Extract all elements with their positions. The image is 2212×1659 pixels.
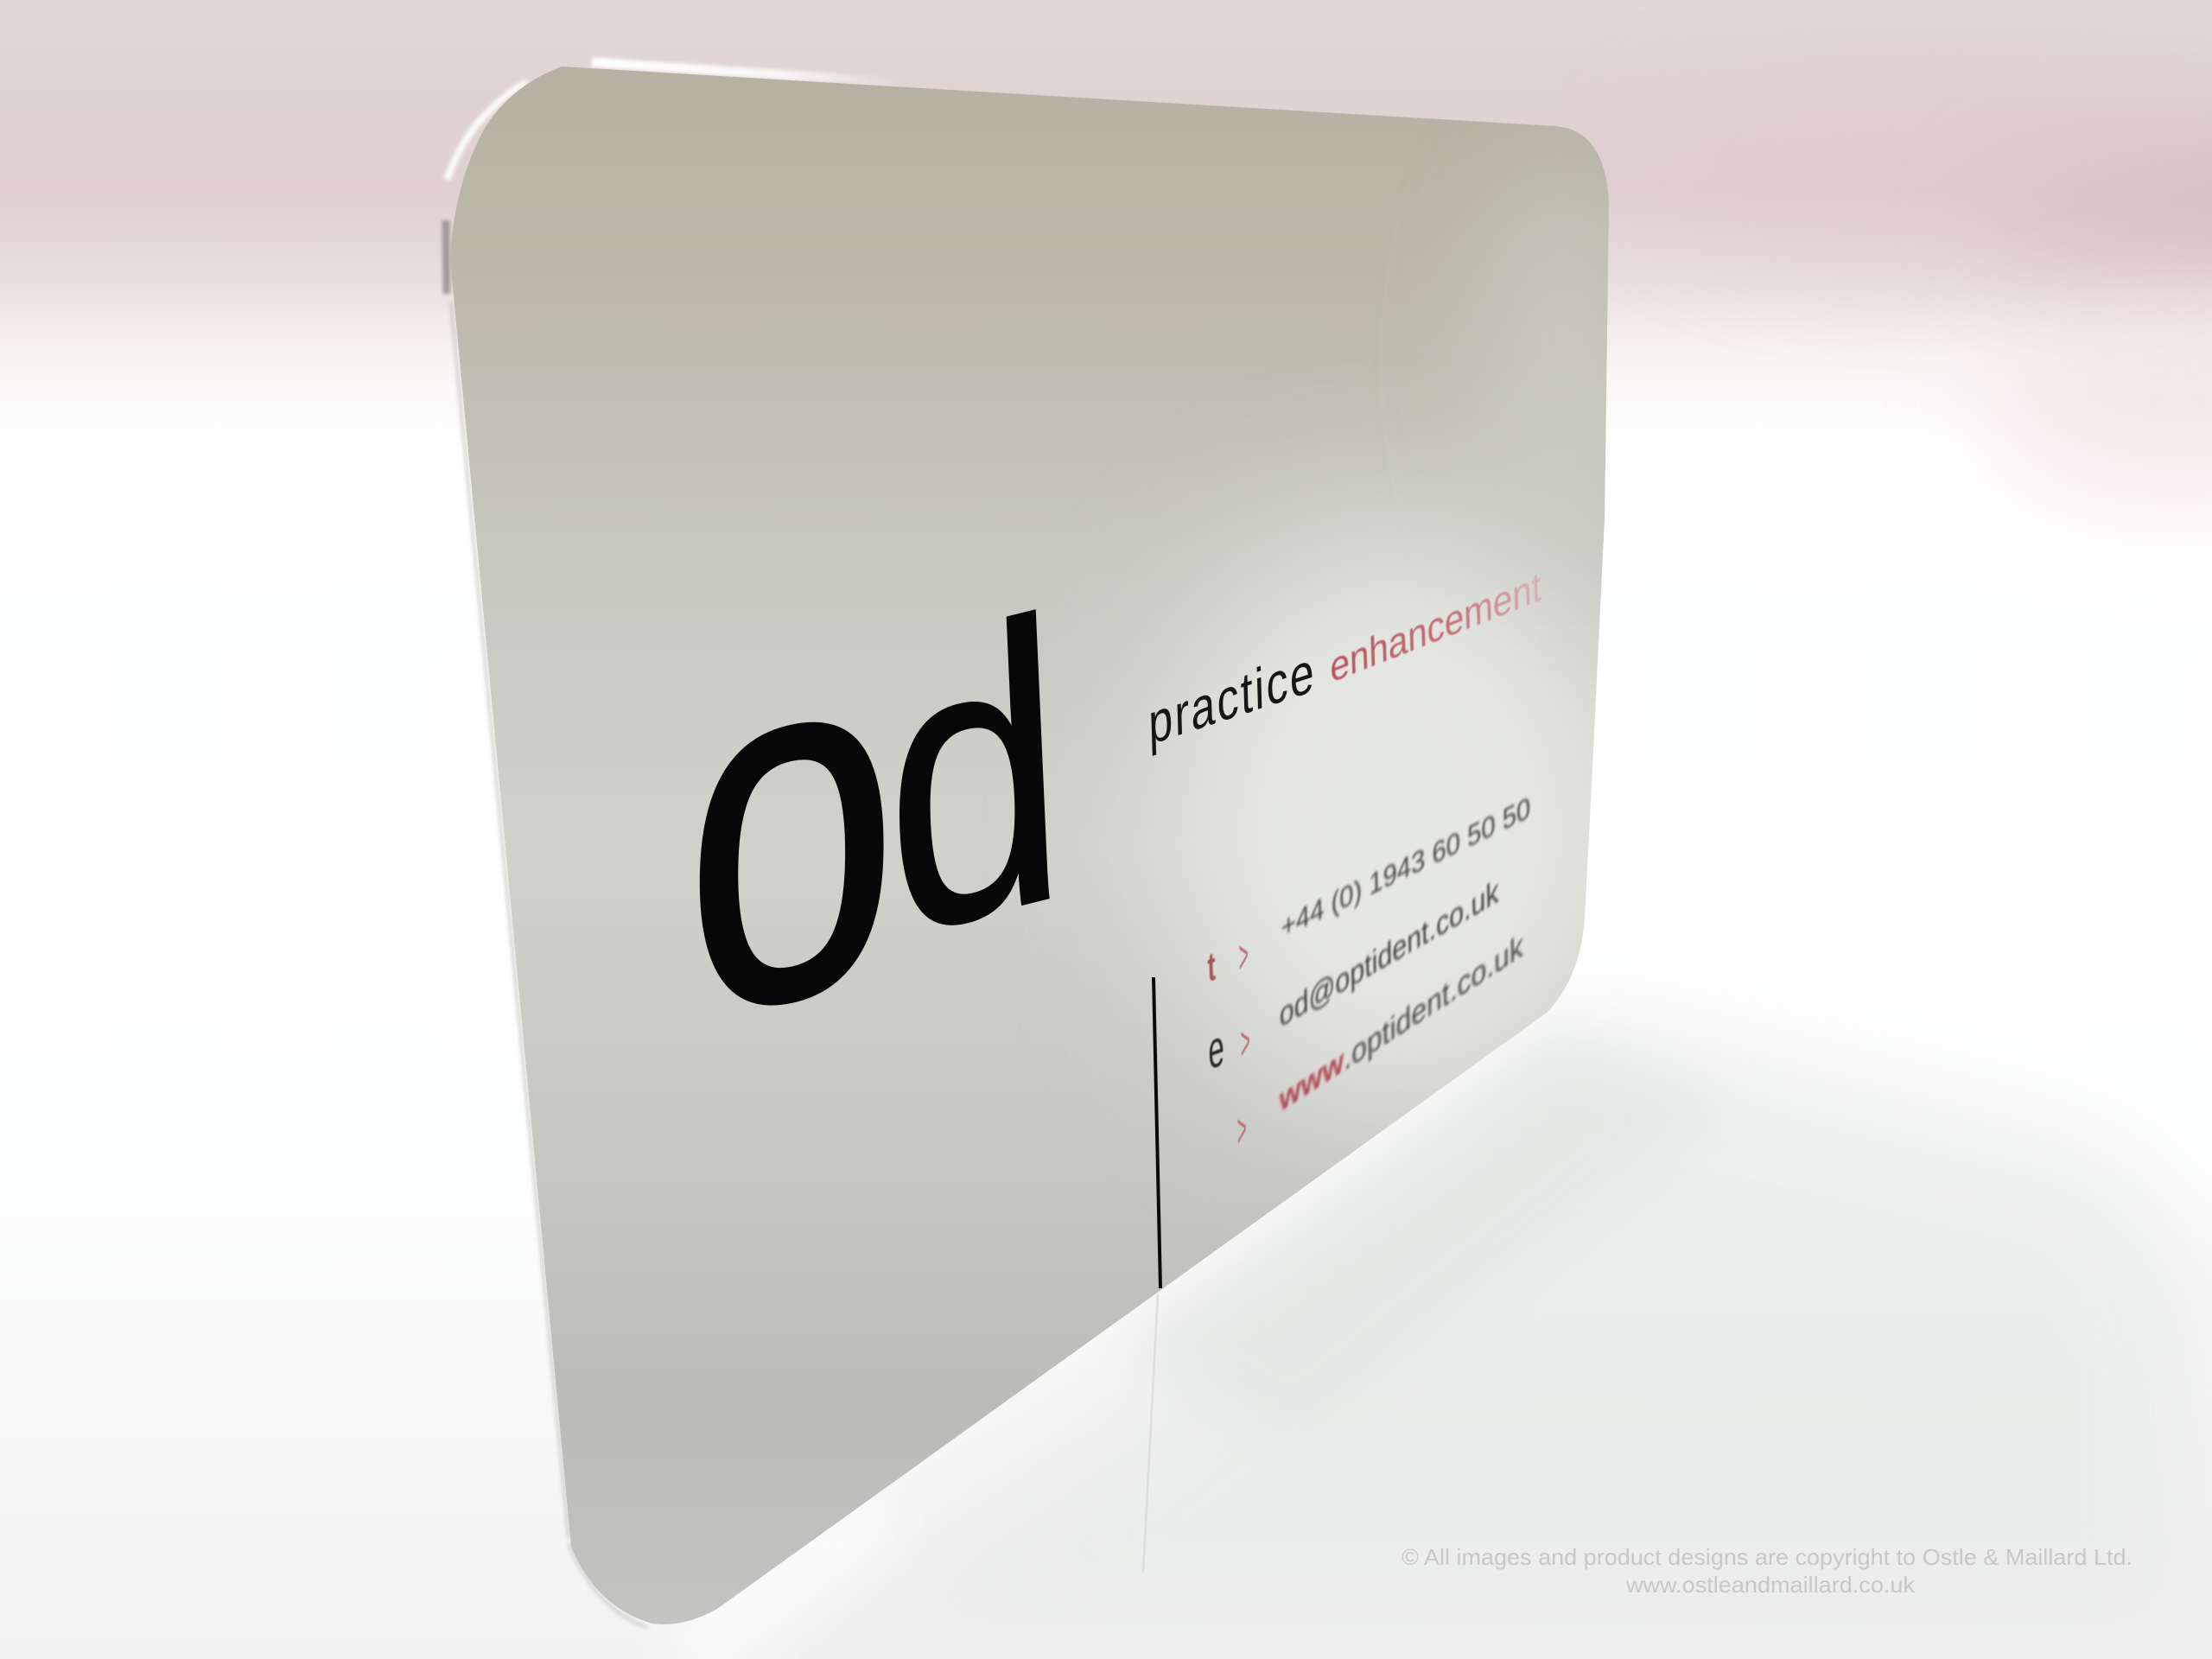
business card panel: [415, 43, 1642, 1650]
rule reflection: [1143, 1294, 1158, 1573]
email row: e: [1207, 1018, 1225, 1081]
logo: od: d: [875, 533, 1073, 1022]
copyright notice: www.ostleandmaillard.co.uk: [1625, 1572, 1916, 1598]
phone row: >: [1238, 926, 1249, 984]
logo: od: [685, 522, 1073, 1125]
email row: od@optident.co.uk: [1279, 871, 1500, 1034]
copyright notice: © All images and product designs are copyright to Ostle & Maillard Ltd.: [1402, 1544, 2133, 1570]
tagline: practice enhancement: enhancement: [1330, 563, 1542, 691]
tagline: practice enhancement: practice: [1147, 637, 1317, 757]
card shading: right edge: [1494, 185, 1609, 442]
logo: od: o: [685, 522, 898, 1125]
email row: >: [1240, 1013, 1250, 1071]
web row: >: [1236, 1100, 1247, 1158]
vertical rule: [1154, 977, 1160, 1288]
tagline: practice enhancement: [1147, 563, 1542, 757]
phone row: t: [1207, 944, 1217, 991]
copyright notice: [1402, 1544, 2133, 1598]
phone row: +44 (0) 1943 60 50 50: [1281, 791, 1531, 945]
email row: [1207, 871, 1500, 1081]
floor shadow: card reflection: [683, 1020, 2212, 1659]
web row: www.optident.co.uk: [1278, 926, 1524, 1121]
card edge highlight: [446, 62, 907, 1628]
contact details: [1207, 791, 1531, 1158]
card shading: bright lower right: [1166, 536, 1633, 1106]
phone row: [1207, 791, 1531, 991]
